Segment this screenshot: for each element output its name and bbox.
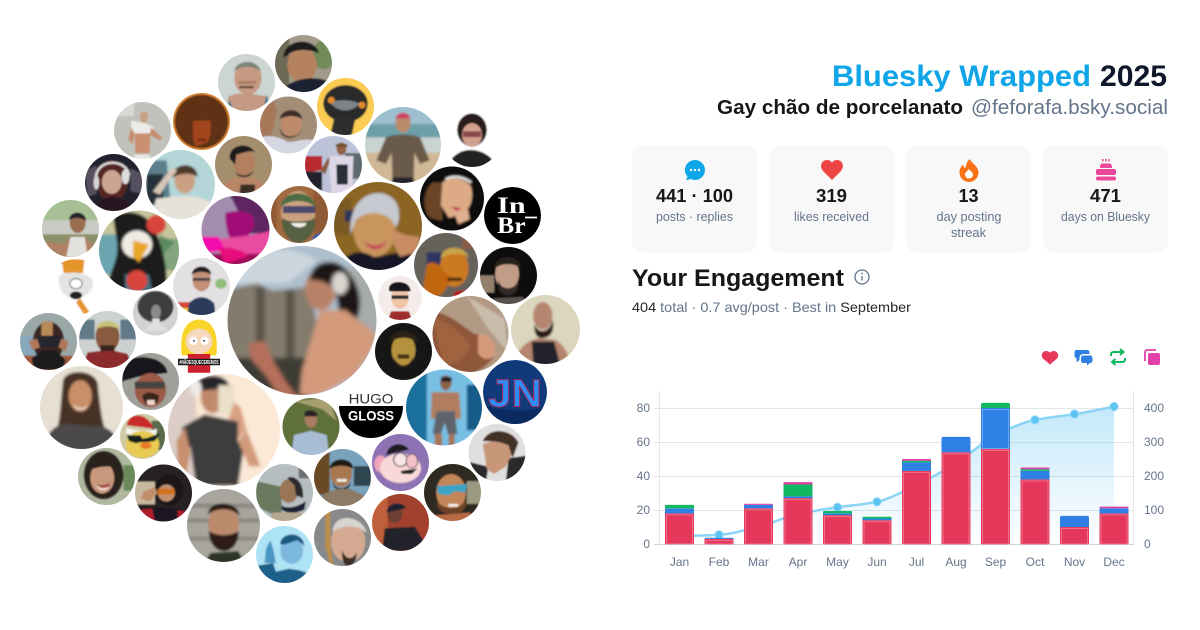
display name: Gay chão de porcelanato [717,97,963,119]
month labels: Oct [1026,555,1045,569]
stat card: posts: 441 · 100 [656,186,733,206]
icon: replies legend [1074,350,1092,366]
avatar: man lifting shirt [114,102,171,159]
avatar: afro illustration [173,93,230,150]
right axis: 100 [1144,503,1164,517]
avatar: Hugo Gloss logo: GLOSS [348,408,394,424]
cumulative points [715,402,1118,539]
avatar: bald man with mirrored sunglasses [424,464,481,521]
avatar: man in suit among trees [282,398,340,455]
avatar: shirtless man dark hair [215,136,272,193]
stat card: likes [769,145,894,253]
avatar: mirror selfie man [162,368,286,492]
avatar: cartoon man with glasses [378,276,422,320]
avatar: blond man in red shirt [76,308,139,371]
avatar: man at pond [42,200,99,257]
avatar cloud [17,32,583,586]
avatar: Hugo Gloss logo [339,394,403,438]
avatar: purple cartoon face [372,434,429,491]
avatar: pop-art comic woman [420,166,484,230]
month labels: Jun [867,555,887,569]
month labels [670,555,1125,569]
avatar: InBr logo [484,187,541,244]
bar: Oct [1020,468,1050,544]
icon: info [855,270,869,284]
right axis [1144,401,1164,551]
month labels: May [826,555,849,569]
avatar: woman with glasses [452,112,492,167]
right axis: 0 [1144,537,1151,551]
left axis: 40 [637,469,650,483]
avatar: bearded man looking down [183,485,264,566]
bar: Aug [942,437,970,544]
avatar: man with headphones by plants [253,461,316,524]
avatar: close-up of skin [432,296,508,372]
avatar: woman with headset [85,154,142,211]
avatar: silver-haired woman [334,182,422,270]
avatar: bald man in tank top [511,295,580,364]
stat card: streak: 13 [958,186,978,206]
icon: heart legend [1042,351,1058,364]
avatar: man with hat and glasses [119,350,182,413]
handle: @feforafa.bsky.social [971,97,1168,119]
stat card: streak: streak [951,225,986,240]
left axis: 0 [643,537,650,551]
avatar: man with white shirt, hand in hair [146,150,215,219]
avatar: duck with Santa hat [118,412,167,461]
right axis: 200 [1144,469,1164,483]
avatar: camera selfie [17,310,80,373]
left axis: 20 [637,503,650,517]
left axis: 80 [637,401,650,415]
icon: cake [1096,159,1116,180]
stat card: likes: likes received [794,209,869,224]
bar: Nov [1060,516,1089,544]
avatar: cartoon bird with flower [99,210,179,290]
avatar: yellow-haired cartoon [178,320,220,373]
month labels: Dec [1103,555,1125,569]
month labels: Jul [909,555,924,569]
avatar: man in profile [468,424,526,481]
stat card: streak [906,145,1031,253]
stat card: days on Bluesky: days on Bluesky [1061,209,1150,224]
title: Bluesky Wrapped [832,60,1091,93]
icon: repost legend [1111,349,1125,365]
stat card: posts [632,145,757,253]
avatar: woman with long hair [36,362,127,453]
avatar: InBr logo: Br [497,213,526,238]
bar: Jan [665,505,694,544]
bar: Jun [862,517,892,544]
stat card: posts: posts · replies [656,209,733,224]
avatar: Hugo Gloss logo: HUGO [349,391,393,406]
month labels: Jan [670,555,689,569]
avatar: man with white hair [314,509,371,566]
avatar: man with plant [275,35,332,92]
stat card: days on Bluesky [1043,145,1168,253]
month labels: Apr [789,555,807,569]
title: 2025 [1100,60,1167,93]
avatar: bearded man with glasses [271,186,328,243]
avatar: smiling man by blue building [314,449,371,506]
avatar: tattooed man on beach [365,107,441,183]
avatar: cartoon tiger [58,259,94,314]
bar: Sep [981,403,1010,544]
month labels: Aug [945,555,967,569]
avatar: black and white afro [133,290,178,336]
avatar: main portrait, man with headphones [228,246,376,395]
icon: heart [821,160,843,180]
avatar: emu [317,78,374,135]
avatar: man beard white shirt [260,96,317,154]
avatar: orange-tinted man [414,233,478,297]
chart: monthly engagement [637,391,1164,569]
icon: quotes legend [1145,350,1160,365]
bar: May [823,511,852,544]
left axis [637,401,650,551]
bar: Mar [744,504,773,544]
avatar: InBr logo: In [497,193,526,218]
avatar: pink illustrated man [202,196,270,264]
stat card: likes: 319 [816,186,847,206]
avatar: shirtless man by blue door [406,370,482,446]
avatar: woman in Flamengo shirt with sunglasses [132,462,195,524]
left axis: 60 [637,435,650,449]
chart legend [1042,349,1160,366]
cumulative line [680,407,1114,536]
bar: Feb [704,538,734,544]
avatar: man with rainbow flag [173,258,230,315]
cumulative area [680,407,1114,544]
avatar: man with cap [218,54,275,111]
bar: Jul [902,459,931,544]
stat card: streak: day posting [936,209,1002,224]
month labels: Nov [1064,555,1085,569]
avatar: JN logo [483,360,547,424]
avatar: bearded man on black [480,247,537,304]
stacked bars [665,403,1128,544]
avatar: smiling woman [75,445,138,508]
month labels: Mar [748,555,769,569]
avatar: yellow-haired cartoon: #NÃOESQUECEREMOS [179,359,219,366]
month labels: Sep [985,555,1006,569]
stat card: days on Bluesky: 471 [1090,186,1121,206]
icon: chat bubble [685,160,705,180]
avatar: man in red cap [372,494,429,551]
month labels: Feb [709,555,730,569]
avatar: JN logo: JN [488,372,542,415]
bar: Dec [1100,507,1128,544]
icon: flame [960,159,978,182]
avatar: man with cars [305,136,362,193]
right axis: 300 [1144,435,1164,449]
bar: Apr [784,482,812,544]
avatar: 3D blue character [253,523,316,586]
right axis: 400 [1144,401,1164,415]
engagement summary: 404 total · 0.7 avg/post · Best in September [632,299,911,315]
heading: Your Engagement: Your Engagement [632,265,844,292]
avatar: painted portrait [375,323,432,380]
